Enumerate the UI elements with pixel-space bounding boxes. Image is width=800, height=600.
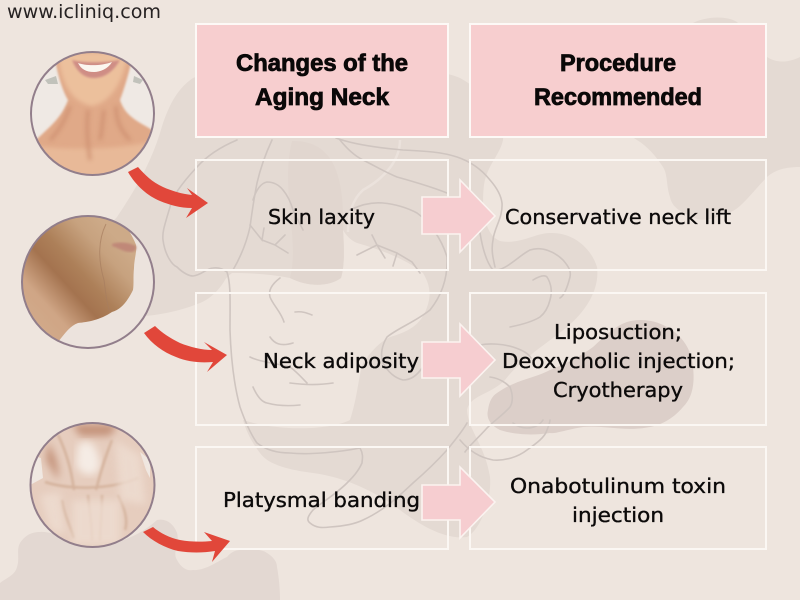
row 1 procedure: conservative neck lift <box>470 160 766 270</box>
row 2 procedure: liposuction, deoxycholic injection, cryotherapy <box>470 293 766 425</box>
red arrow to skin laxity <box>128 167 208 218</box>
block arrow row 3 <box>422 467 495 538</box>
row 1 change: skin laxity <box>196 160 448 270</box>
header: procedure recommended: Procedure <box>560 50 676 77</box>
row 2 change: neck adiposity: Neck adiposity <box>263 349 419 373</box>
red arrow to platysmal banding <box>143 527 230 562</box>
header: changes of the aging neck: Aging Neck <box>255 84 390 111</box>
row 3 change: platysmal banding <box>196 447 448 549</box>
header: changes of the aging neck: Changes of the <box>236 50 408 77</box>
website label: www.icliniq.com <box>7 1 161 23</box>
face line art <box>163 138 570 528</box>
row 3 procedure: onabotulinum toxin injection <box>470 447 766 549</box>
row 3 change: platysmal banding: Platysmal banding <box>223 488 420 512</box>
row 2 change: neck adiposity <box>196 293 448 425</box>
row 2 procedure: liposuction, deoxycholic injection, cryotherapy: Cryotherapy <box>553 378 683 402</box>
row 2 procedure: liposuction, deoxycholic injection, cryotherapy: Liposuction; <box>554 320 682 344</box>
block arrow row 1 <box>422 180 495 252</box>
header: changes of the aging neck <box>196 24 448 137</box>
row 3 procedure: onabotulinum toxin injection: injection <box>572 503 664 527</box>
red arrow to neck adiposity <box>144 326 227 372</box>
row 3 procedure: onabotulinum toxin injection: Onabotulinum toxin <box>510 474 726 498</box>
photo: platysmal banding <box>30 421 156 549</box>
header: procedure recommended <box>470 24 766 137</box>
block arrow row 2 <box>422 324 495 396</box>
photo: neck adiposity profile <box>20 214 156 350</box>
photo: aging neck with smile <box>30 50 158 180</box>
header: procedure recommended: Recommended <box>534 84 702 111</box>
row 1 change: skin laxity: Skin laxity <box>268 205 375 229</box>
row 1 procedure: conservative neck lift: Conservative neck lift <box>505 205 731 229</box>
row 2 procedure: liposuction, deoxycholic injection, cryotherapy: Deoxycholic injection; <box>502 349 735 373</box>
